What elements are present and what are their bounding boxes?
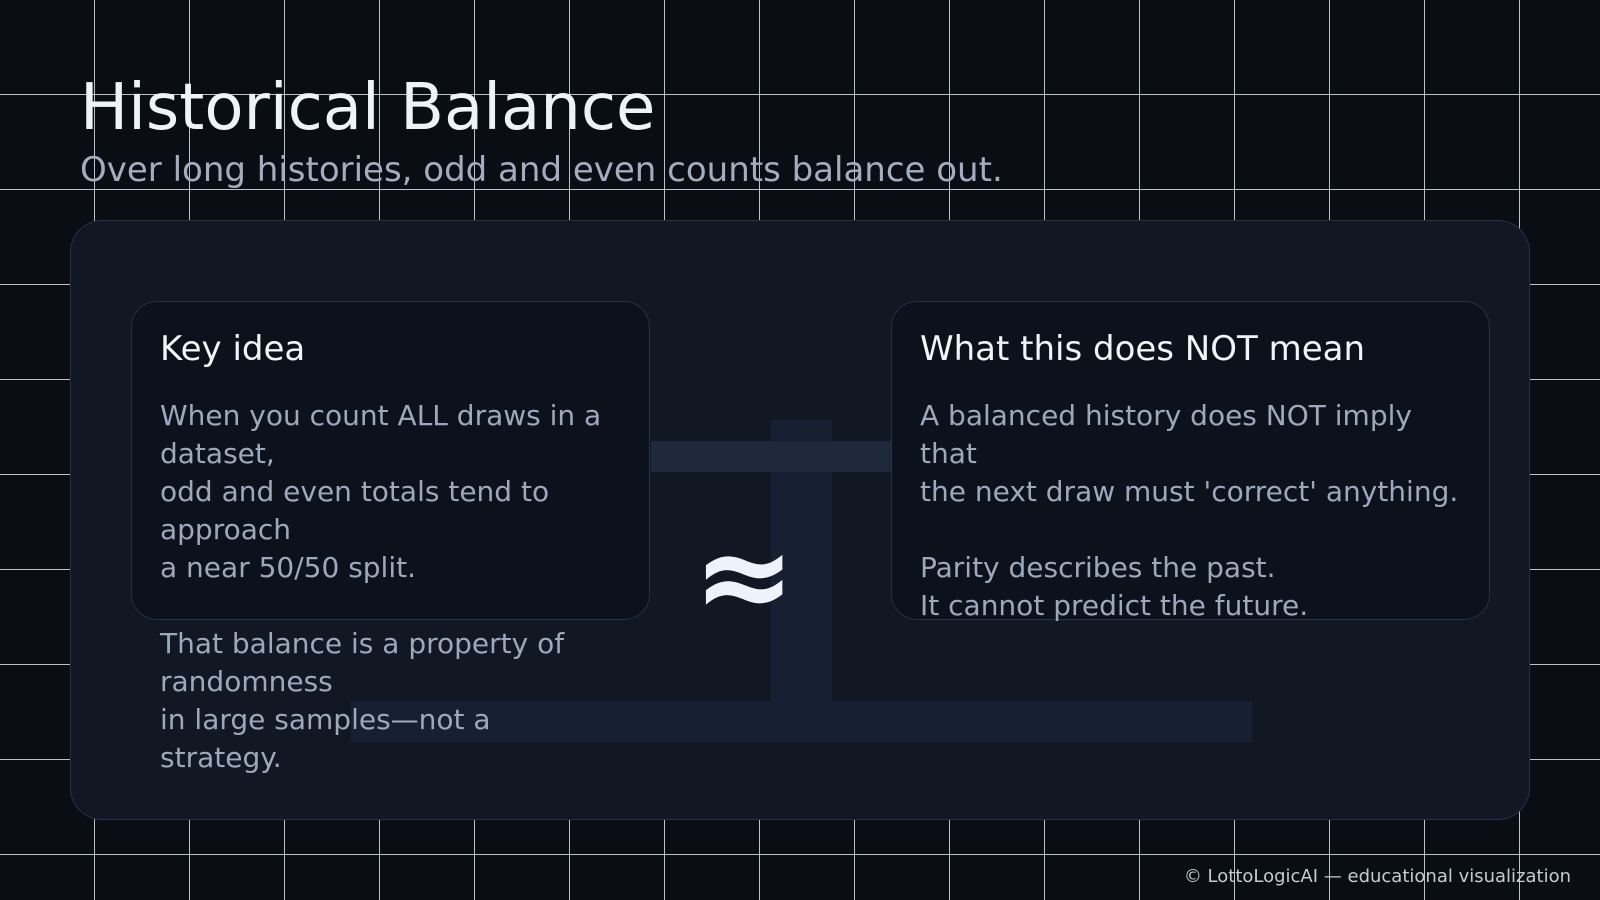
title: Historical Balance [80,71,655,145]
heading: key idea: Key idea [160,329,305,369]
panel: key idea [131,301,650,620]
icon: approximately equal: ≈ [693,505,795,647]
footer: © LottoLogicAI — educational visualization [1184,866,1571,887]
scale post [771,420,832,702]
text block: key idea body: When you count ALL draws in a dataset, odd and even totals tend to approach a near 50/50 split. That balance is a property of randomness in large samples—not a strategy. [160,399,601,774]
heading: not mean: What this does NOT mean [920,329,1365,369]
scale beam [651,441,891,472]
main panel [70,220,1530,820]
text block: not mean body: A balanced history does NOT imply that the next draw must 'correct' anything. Parity describes the past. It cannot predict the future. [920,399,1458,622]
scale base [351,701,1252,742]
subtitle: Over long histories, odd and even counts balance out. [80,150,1003,190]
panel: what this does not mean [891,301,1490,620]
